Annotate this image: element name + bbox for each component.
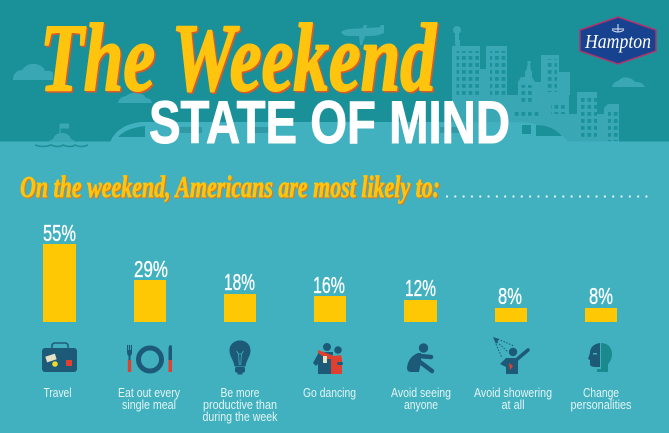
labels <box>44 386 632 424</box>
bar: eat out: 29% <box>134 256 168 282</box>
label: productive: Be more <box>220 386 260 400</box>
icon: sitting person <box>407 343 432 372</box>
plane <box>341 25 384 45</box>
clouds <box>13 64 645 103</box>
bar: productive: 18% <box>224 269 255 295</box>
bar chart <box>43 220 617 322</box>
icon: dancing couple <box>313 343 343 374</box>
train <box>110 122 568 142</box>
icon: light bulb <box>230 340 250 374</box>
logo <box>580 17 656 64</box>
label: change personalities: Change <box>583 386 619 400</box>
label: avoid showering: at all <box>502 398 524 412</box>
bar: change personalities <box>585 283 617 322</box>
bar: avoid seeing <box>404 275 437 322</box>
icon: split face <box>588 343 612 372</box>
label: avoid seeing: Avoid seeing <box>391 386 451 400</box>
heading: On the weekend, Americans are most likely to: <box>20 169 440 204</box>
bar: travel: 55% <box>43 220 76 246</box>
label: eat out <box>118 386 181 412</box>
label: eat out: Eat out every <box>118 386 181 400</box>
bar: dancing: 16% <box>313 272 345 298</box>
bar: eat out <box>134 256 168 322</box>
icon: suitcase <box>42 343 77 372</box>
label: avoid seeing <box>391 386 451 412</box>
bar: productive <box>224 269 256 322</box>
subtitle title: STATE OF MIND <box>149 89 510 156</box>
label: avoid showering: Avoid showering <box>474 386 552 400</box>
skyline <box>452 26 619 142</box>
logo: Hampton <box>584 31 651 53</box>
boat <box>35 124 88 146</box>
ground <box>0 142 669 433</box>
dotted leader <box>447 195 654 198</box>
label: change personalities <box>570 386 632 412</box>
bar: avoid seeing: 12% <box>405 275 436 301</box>
label: avoid seeing: anyone <box>404 398 438 412</box>
title: The Weekend <box>40 4 437 111</box>
header band <box>0 0 669 142</box>
label: productive: productive than <box>203 398 277 412</box>
title: The Weekend <box>42 6 439 112</box>
bar: change personalities: 8% <box>589 283 613 309</box>
label: travel: Travel <box>44 386 72 400</box>
label: productive <box>202 386 278 424</box>
bar: dancing <box>313 272 346 322</box>
icon: shower <box>493 337 528 374</box>
heading <box>20 169 441 205</box>
label: avoid showering <box>474 386 552 412</box>
bar: avoid showering: 8% <box>498 283 522 309</box>
bar: avoid showering <box>495 283 527 322</box>
label: eat out: single meal <box>122 398 176 412</box>
building windows <box>456 51 622 141</box>
label: dancing: Go dancing <box>303 386 356 400</box>
heading: On the weekend, Americans are most likely to: <box>21 170 441 205</box>
label: change personalities: personalities <box>570 398 632 412</box>
icon: plate and cutlery <box>127 345 172 372</box>
bar: travel <box>43 220 76 322</box>
label: productive: during the week <box>202 410 278 424</box>
